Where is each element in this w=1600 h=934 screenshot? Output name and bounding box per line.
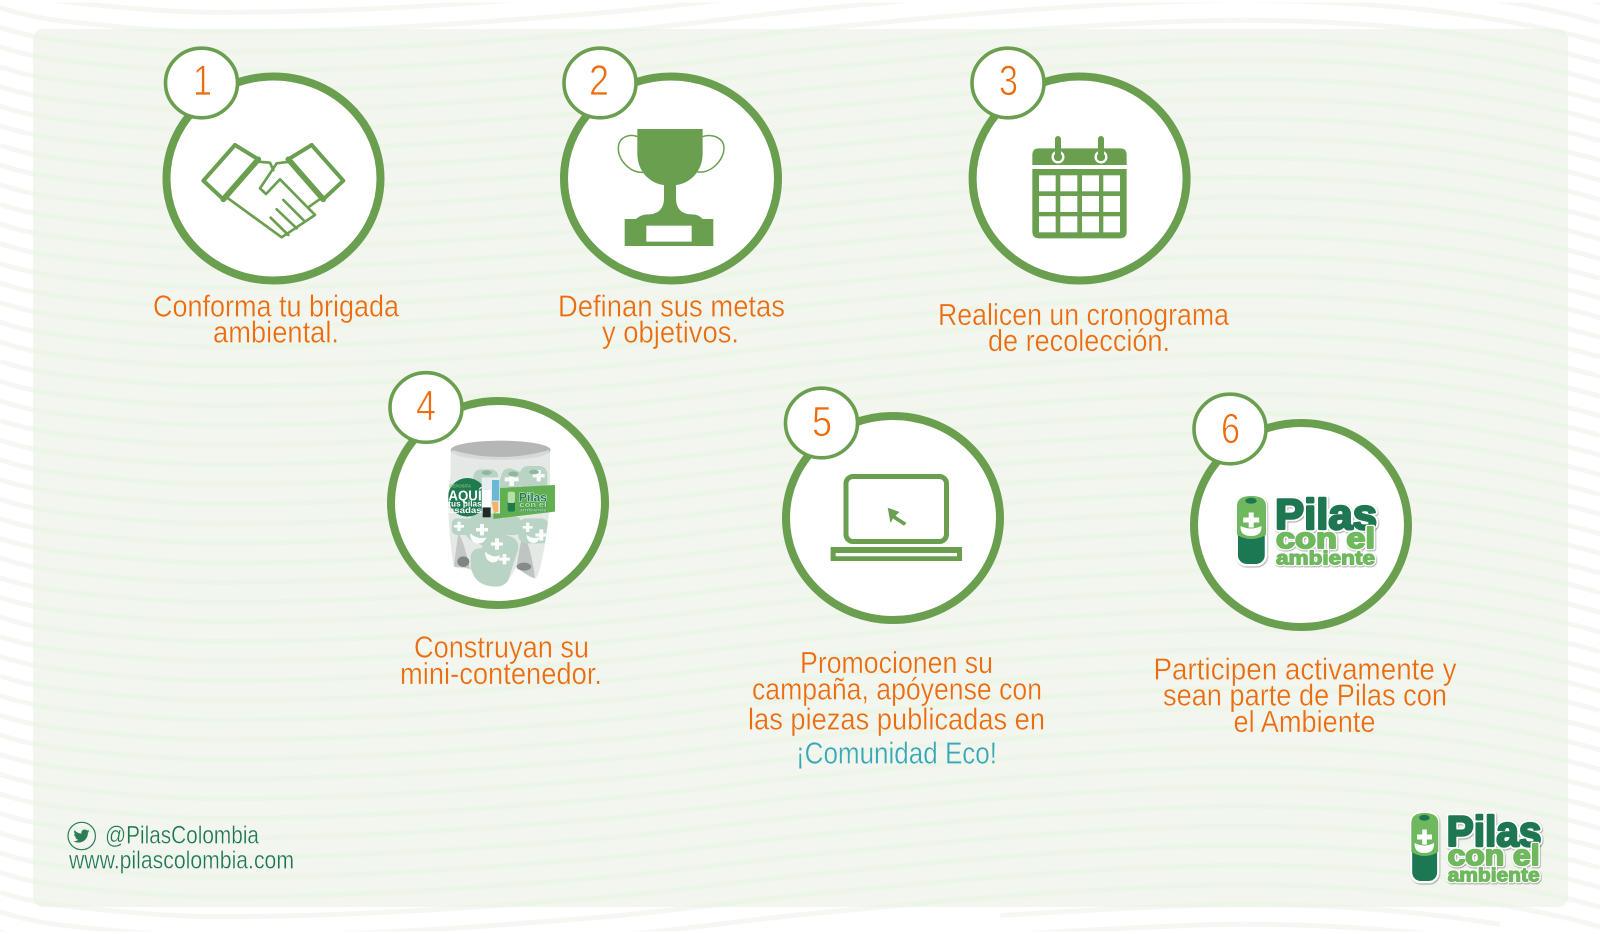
icon: Pilas logo: Pilas <box>1275 491 1377 539</box>
icon: bottle container: DEPOSITA <box>449 483 472 488</box>
logo: Pilas con el ambiente: Pilas <box>1447 807 1542 855</box>
logo: Pilas con el ambiente: con el <box>1448 839 1540 871</box>
step 2: goals <box>558 48 785 350</box>
icon: Pilas logo: con el <box>1276 523 1375 555</box>
icon: Pilas logo <box>1237 491 1377 569</box>
icon: trophy <box>618 129 724 246</box>
label <box>153 288 400 350</box>
logo: Pilas con el ambiente: ambiente <box>1448 864 1540 885</box>
number badge 4 <box>390 373 462 442</box>
number badge 1 <box>166 48 238 118</box>
label: de recolección. <box>988 323 1170 358</box>
logo: Pilas con el ambiente: con el <box>1448 839 1540 871</box>
number badge 2 <box>564 48 636 118</box>
icon: calendar <box>1032 136 1127 238</box>
ring <box>973 76 1187 280</box>
footer: social links <box>68 821 294 875</box>
logo: Pilas con el ambiente: ambiente <box>1448 864 1540 885</box>
step 4: mini container <box>390 373 605 691</box>
ring <box>1194 423 1408 627</box>
icon: twitter <box>68 822 95 850</box>
ring <box>786 416 1000 620</box>
icon: laptop <box>831 476 962 561</box>
icon: Pilas logo: ambiente <box>1276 548 1375 569</box>
label: campaña, apóyense con <box>752 671 1042 706</box>
label: Participen activamente y <box>1154 651 1457 686</box>
number badge 4: 4 <box>416 382 436 430</box>
step 5: campaign <box>748 388 1045 771</box>
label: Realicen un cronograma <box>938 297 1230 332</box>
website: www.pilascolombia.com <box>68 847 294 875</box>
ring <box>166 76 380 280</box>
icon: bottle container: con el <box>519 500 547 509</box>
ring <box>391 401 605 605</box>
number badge 3 <box>972 48 1044 118</box>
label <box>1154 651 1457 739</box>
logo: Pilas con el ambiente <box>1411 807 1542 885</box>
label: Promocionen su <box>800 645 993 680</box>
label <box>400 630 602 691</box>
icon: bottle container: usadas <box>448 506 482 515</box>
number badge 3: 3 <box>999 57 1018 105</box>
step 3: schedule <box>938 48 1230 358</box>
number badge 6 <box>1194 394 1266 464</box>
label: ¡Comunidad Eco! <box>796 736 997 771</box>
icon: bottle container: Pilas <box>519 490 547 504</box>
label: las piezas publicadas en <box>748 702 1045 737</box>
label <box>748 645 1045 771</box>
number badge 6: 6 <box>1221 405 1240 453</box>
icon: bottle container: tus pilas <box>448 500 482 509</box>
label: Conforma tu brigada <box>153 288 400 324</box>
handle: @PilasColombia <box>105 821 259 849</box>
step 1: brigade <box>153 48 400 350</box>
icon: handshake <box>203 145 343 237</box>
icon: Pilas logo: con el <box>1276 523 1375 555</box>
number badge 2: 2 <box>589 57 609 105</box>
label: mini-contenedor. <box>400 656 602 691</box>
icon: Pilas logo: ambiente <box>1276 548 1375 569</box>
number badge 5: 5 <box>812 398 832 446</box>
number badge 5 <box>786 388 858 458</box>
icon: bottle container <box>448 441 555 594</box>
logo: Pilas con el ambiente: Pilas <box>1447 807 1542 855</box>
ring <box>564 76 778 280</box>
label <box>558 288 785 350</box>
icon: bottle container: AQUÍ <box>448 488 483 505</box>
step 6: participate <box>1154 394 1457 739</box>
label: sean parte de Pilas con <box>1163 678 1447 713</box>
icon: bottle container: ambiente <box>519 508 547 514</box>
label: y objetivos. <box>602 315 739 350</box>
label <box>938 297 1230 358</box>
label: ambiental. <box>213 315 339 350</box>
label: el Ambiente <box>1234 704 1376 739</box>
label: Definan sus metas <box>558 288 785 324</box>
label: Construyan su <box>414 630 589 664</box>
number badge 1: 1 <box>193 57 212 105</box>
icon: Pilas logo: Pilas <box>1275 491 1377 539</box>
